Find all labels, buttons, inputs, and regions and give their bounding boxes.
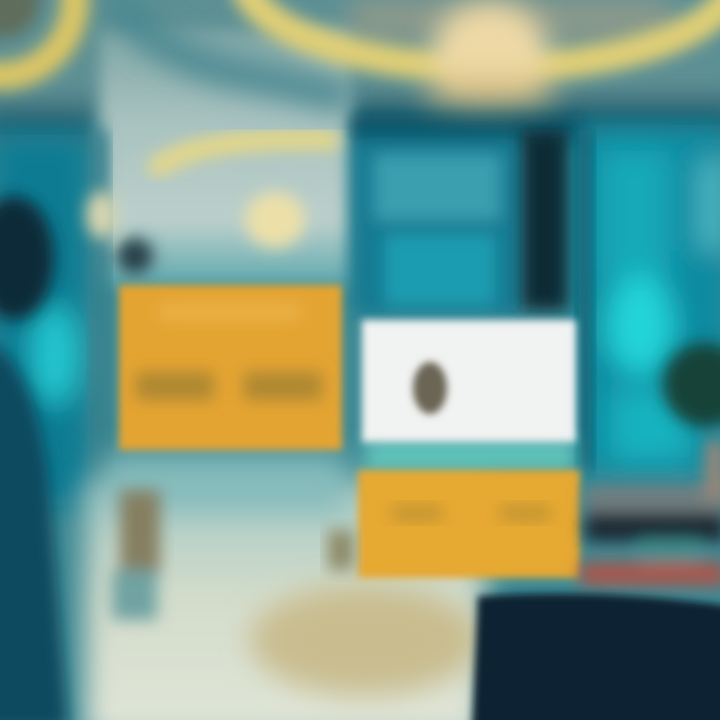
window: right <box>580 125 720 475</box>
wall post left <box>92 130 108 490</box>
silhouette person <box>0 340 68 720</box>
floor <box>85 455 485 720</box>
ring inner dark top left <box>0 0 40 38</box>
window frame right <box>578 130 592 470</box>
plant <box>663 343 720 500</box>
panel: orange lower <box>358 470 580 578</box>
side table right <box>580 485 720 586</box>
panel: pale back wall <box>100 30 350 285</box>
ceiling <box>0 0 720 139</box>
window: left <box>0 135 90 505</box>
panel: orange lower details <box>392 505 550 521</box>
chandelier ring: top right <box>245 0 720 68</box>
ceiling curve <box>115 0 350 98</box>
rug <box>250 585 480 695</box>
panel: orange upper details <box>136 306 322 400</box>
floor figure <box>112 490 160 620</box>
chandelier ring: top left <box>0 0 75 76</box>
window: centre <box>352 115 582 315</box>
portrait in white card <box>413 362 447 414</box>
dark sofa <box>472 594 720 720</box>
chandelier glow <box>420 2 560 106</box>
silhouette head <box>0 196 54 320</box>
panel: orange upper <box>119 285 342 450</box>
lamp glow <box>86 191 305 274</box>
small centre figure <box>328 530 354 570</box>
teal band under white panel <box>365 438 575 473</box>
panel: white card <box>362 320 576 442</box>
gold arc lamp <box>152 139 338 172</box>
dark column <box>522 130 570 310</box>
